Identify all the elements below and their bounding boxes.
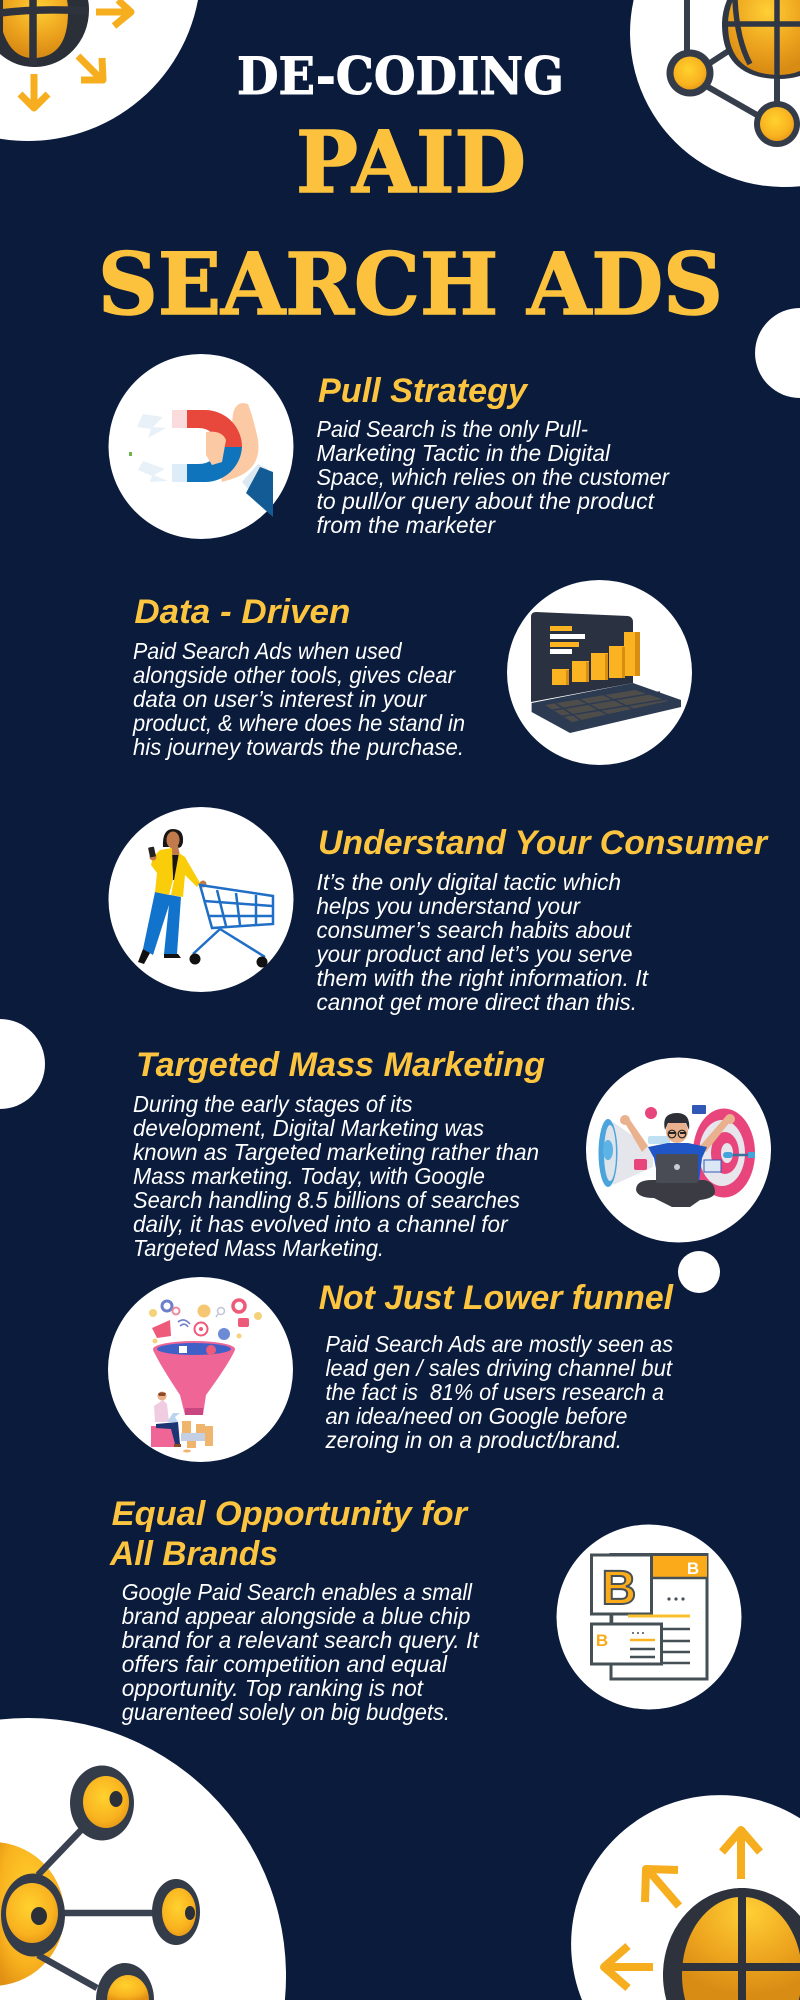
body text: Search handling 8.5 billions of searches: [133, 1187, 520, 1213]
body text: cannot get more direct than this.: [316, 989, 637, 1015]
panel: data driven: [132, 580, 692, 765]
decorative white circle left: [0, 1019, 45, 1109]
body text: consumer’s search habits about: [316, 917, 633, 943]
body text: from the marketer: [316, 512, 496, 538]
body text: brand appear alongside a blue chip: [122, 1603, 471, 1629]
body text: Mass marketing. Today, with Google: [133, 1163, 485, 1189]
icon: marketing funnel: [108, 1277, 293, 1462]
body text: [133, 1091, 539, 1261]
body text: offers fair competition and equal: [122, 1651, 448, 1677]
body text: to pull/or query about the product: [316, 488, 656, 514]
body text: daily, it has evolved into a channel for: [133, 1211, 509, 1237]
decorative small white circle: [678, 1251, 720, 1293]
body text: alongside other tools, gives clear: [133, 662, 456, 688]
icon: laptop with bar chart: [507, 580, 692, 765]
body text: lead gen / sales driving channel but: [326, 1355, 674, 1381]
heading: All Brands: [109, 1535, 278, 1573]
title line: Search Ads: SEARCH ADS: [98, 235, 723, 335]
heading: Targeted Mass Marketing: [136, 1046, 545, 1084]
heading: Not Just Lower funnel: [319, 1279, 675, 1317]
panel: equal opportunity for all brands: [109, 1495, 742, 1725]
body text: Paid Search Ads are mostly seen as: [326, 1331, 673, 1357]
body text: [122, 1579, 480, 1725]
body text: data on user’s interest in your: [133, 686, 427, 712]
body text: guarenteed solely on big budgets.: [122, 1699, 450, 1725]
title: [98, 47, 723, 335]
body text: opportunity. Top ranking is not: [122, 1675, 425, 1701]
body text: Paid Search Ads when used: [133, 638, 403, 664]
icon: shopper with cart: [108, 807, 294, 992]
body text: zeroing in on a product/brand.: [325, 1427, 622, 1453]
body text: helps you understand your: [316, 893, 581, 919]
title line: De-coding: DE-CODING: [237, 47, 564, 107]
body text: [316, 416, 670, 538]
heading: Pull Strategy: [318, 372, 529, 410]
corner decoration: top-right network: [630, 0, 800, 187]
body text: Paid Search is the only Pull-: [316, 416, 588, 442]
panel: pull strategy: [108, 354, 670, 539]
body text: Google Paid Search enables a small: [122, 1579, 473, 1605]
body text: [325, 1331, 674, 1453]
body text: known as Targeted marketing rather than: [133, 1139, 539, 1165]
heading: Equal Opportunity for: [112, 1495, 469, 1533]
body text: the fact is 81% of users research a: [326, 1379, 664, 1405]
body text: Targeted Mass Marketing.: [133, 1235, 384, 1261]
title line: Paid: PAID: [296, 113, 526, 213]
heading: [109, 1495, 469, 1573]
heading: Understand Your Consumer: [318, 824, 769, 862]
icon: brand cards: [556, 1524, 742, 1710]
body text: [315, 869, 650, 1015]
heading: Data - Driven: [134, 593, 350, 631]
body text: [132, 638, 465, 760]
body text: During the early stages of its: [133, 1091, 413, 1117]
body text: product, & where does he stand in: [132, 710, 465, 736]
body text: development, Digital Marketing was: [133, 1115, 484, 1141]
panel: understand your consumer: [108, 807, 769, 1015]
body text: his journey towards the purchase.: [133, 734, 464, 760]
icon: brand cards: B: [602, 1562, 636, 1615]
decorative white circle right: [755, 308, 800, 398]
body text: Space, which relies on the customer: [316, 464, 670, 490]
body text: brand for a relevant search query. It: [122, 1627, 480, 1653]
panel: targeted mass marketing: [133, 1046, 771, 1261]
body text: an idea/need on Google before: [326, 1403, 628, 1429]
body text: Marketing Tactic in the Digital: [316, 440, 611, 466]
icon: magnet: [108, 354, 294, 539]
body text: your product and let’s you serve: [315, 941, 632, 967]
corner decoration: bottom-left network: [0, 1718, 286, 2000]
icon: brand cards: B: [687, 1559, 699, 1578]
body text: It’s the only digital tactic which: [316, 869, 621, 895]
icon: person with megaphone and target: [586, 1058, 771, 1242]
icon: brand cards: B: [596, 1631, 608, 1650]
body text: them with the right information. It: [316, 965, 650, 991]
corner decoration: bottom-right globe with arrows: [571, 1795, 800, 2000]
panel: not just lower funnel: [108, 1277, 675, 1462]
corner decoration: top-left globe with arrows: [0, 0, 198, 141]
